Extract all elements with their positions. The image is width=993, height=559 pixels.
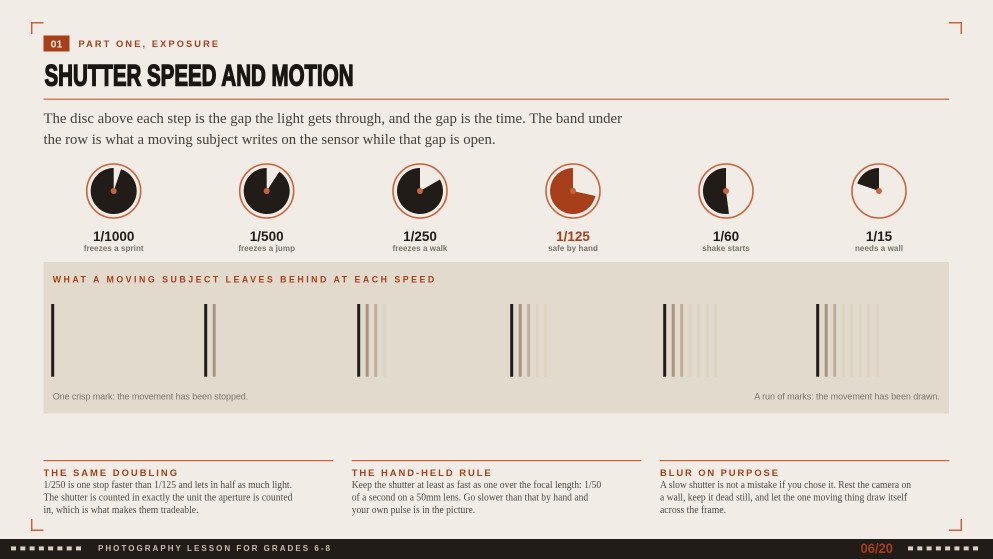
column: the same doubling: in, which is what makes them tradeable. bbox=[44, 505, 198, 516]
trail marks: 1/60 bbox=[663, 304, 717, 377]
column: the hand-held rule: THE HAND-HELD RULE bbox=[352, 467, 491, 478]
disc step: 1/1000: 1/1000 bbox=[93, 229, 134, 244]
column: blur on purpose: a wall, keep it dead still, and let the one moving thing draw itself bbox=[660, 492, 908, 504]
disc step: 1/125 highlighted bbox=[546, 164, 600, 253]
intro text bbox=[44, 111, 622, 148]
disc step: 1/15 bbox=[852, 164, 906, 253]
panel: motion trails bbox=[44, 262, 949, 414]
disc step: 1/250 bbox=[393, 164, 448, 253]
column: the same doubling: 1/250 is one stop faster than 1/125 and lets in half as much light. bbox=[44, 480, 292, 491]
panel heading: WHAT A MOVING SUBJECT LEAVES BEHIND AT EACH SPEED bbox=[53, 274, 434, 284]
column: the hand-held rule: your own pulse is in the picture. bbox=[352, 505, 475, 516]
disc step: 1/500 bbox=[238, 164, 295, 253]
section kicker: PART ONE, EXPOSURE bbox=[78, 39, 218, 49]
trail marks: 1/1000 bbox=[51, 304, 54, 377]
trail marks: 1/250 bbox=[357, 304, 386, 377]
footer bar bbox=[0, 539, 993, 559]
column: the same doubling: The shutter is counted in exactly the unit the aperture is counted bbox=[44, 492, 292, 504]
section kicker: 01 bbox=[51, 38, 62, 50]
trail marks: 1/500 bbox=[204, 304, 216, 377]
disc step: 1/125 highlighted: 1/125 bbox=[556, 229, 590, 244]
footer label: PHOTOGRAPHY LESSON FOR GRADES 6-8 bbox=[98, 544, 331, 553]
disc step: 1/60 bbox=[699, 164, 753, 253]
disc step: 1/15: needs a wall bbox=[855, 244, 903, 253]
film perforations left bbox=[11, 546, 81, 550]
column: the same doubling bbox=[44, 460, 333, 516]
disc step: 1/1000 bbox=[84, 164, 144, 253]
disc step: 1/15: 1/15 bbox=[866, 229, 893, 244]
disc step: 1/500: freezes a jump bbox=[238, 244, 295, 253]
disc step: 1/125 highlighted: safe by hand bbox=[548, 244, 598, 253]
disc step: 1/500: 1/500 bbox=[250, 229, 284, 244]
column: the same doubling: THE SAME DOUBLING bbox=[44, 467, 177, 478]
column: the hand-held rule: of a second on a 50mm lens. Go slower than that by hand and bbox=[352, 492, 588, 504]
shutter disc row bbox=[84, 164, 906, 253]
trail marks: 1/15 bbox=[816, 304, 879, 377]
disc step: 1/250: freezes a walk bbox=[393, 244, 448, 253]
column: the hand-held rule bbox=[352, 460, 641, 516]
film perforations right bbox=[908, 546, 978, 550]
disc step: 1/250: 1/250 bbox=[403, 229, 437, 244]
column: blur on purpose: BLUR ON PURPOSE bbox=[660, 467, 778, 478]
page number: 06/20 bbox=[860, 541, 893, 556]
column: the hand-held rule: Keep the shutter at least as fast as one over the focal length: 1/50 bbox=[352, 480, 601, 491]
column: blur on purpose: A slow shutter is not a mistake if you chose it. Rest the camera on bbox=[660, 480, 911, 491]
caption left: One crisp mark: the movement has been stopped. bbox=[53, 392, 248, 402]
intro text: the row is what a moving subject writes on the sensor while that gap is open. bbox=[44, 132, 496, 148]
disc step: 1/60: shake starts bbox=[702, 244, 750, 253]
trail marks: 1/125 bbox=[510, 304, 547, 377]
column: blur on purpose bbox=[660, 460, 950, 516]
title: SHUTTER SPEED AND MOTION bbox=[44, 59, 354, 92]
disc step: 1/1000: freezes a sprint bbox=[84, 244, 144, 253]
section kicker bbox=[44, 36, 218, 52]
caption right: A run of marks: the movement has been drawn. bbox=[754, 392, 940, 402]
disc step: 1/60: 1/60 bbox=[713, 229, 739, 244]
column: blur on purpose: across the frame. bbox=[660, 505, 726, 516]
intro text: The disc above each step is the gap the light gets through, and the gap is the time. The band under bbox=[44, 111, 622, 127]
